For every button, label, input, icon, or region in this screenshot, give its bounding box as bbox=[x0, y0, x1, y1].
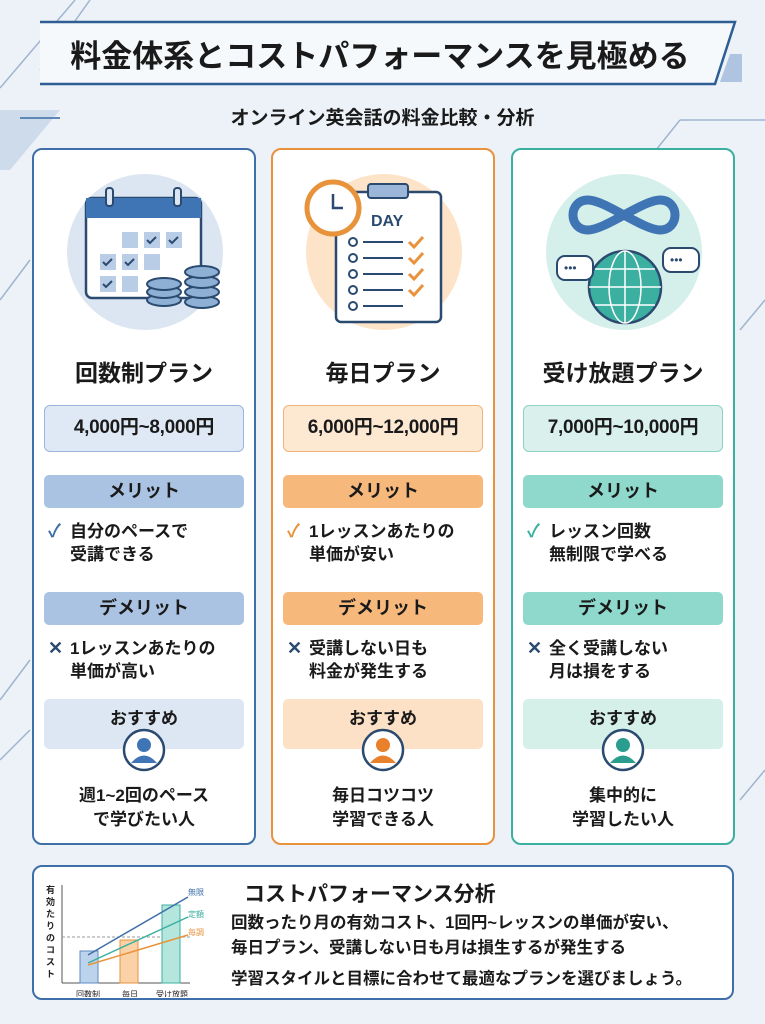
heading: 毎日プラン bbox=[326, 360, 440, 386]
demerit text: 受講しない日も bbox=[309, 639, 428, 658]
demerit text bbox=[48, 638, 215, 681]
title banner: 料金体系とコストパフォーマンスを見極める bbox=[70, 39, 690, 74]
chart: cost comparison: 毎調 bbox=[188, 927, 204, 937]
demerit text: ✕ bbox=[287, 638, 302, 658]
merit text bbox=[287, 521, 454, 564]
price bbox=[523, 405, 723, 452]
recommend box: おすすめ bbox=[110, 709, 178, 728]
merit text bbox=[48, 521, 188, 564]
icon: clipboard with clock bbox=[304, 174, 462, 330]
recommend text: 集中的に bbox=[589, 786, 657, 805]
recommend text: 学習できる人 bbox=[332, 810, 434, 829]
merit text: 1レッスンあたりの bbox=[309, 522, 454, 541]
icon: calendar with coins bbox=[67, 174, 223, 330]
merit bar: メリット bbox=[587, 481, 659, 501]
recommend text bbox=[332, 786, 434, 829]
icon: person bbox=[362, 728, 404, 772]
merit text: 自分のペースで bbox=[70, 522, 188, 541]
demerit bar bbox=[523, 592, 723, 625]
demerit text: 1レッスンあたりの bbox=[70, 639, 215, 658]
merit text: 単価が安い bbox=[309, 545, 394, 564]
demerit text: ✕ bbox=[48, 638, 63, 658]
merit text: 受講できる bbox=[70, 545, 155, 564]
chart: cost comparison: 定額 bbox=[188, 909, 204, 919]
merit bar: メリット bbox=[108, 481, 180, 501]
merit text: ✓ bbox=[527, 521, 540, 541]
chart: cost comparison: コ bbox=[46, 945, 55, 955]
merit bar bbox=[283, 475, 483, 508]
merit text: 無制限で学べる bbox=[549, 545, 668, 564]
analysis text: 回数ったり月の有効コスト、1回円~レッスンの単価が安い、 bbox=[231, 914, 678, 932]
demerit text: ✕ bbox=[527, 638, 542, 658]
chart: cost comparison bbox=[46, 884, 204, 997]
demerit text: 月は損をする bbox=[549, 662, 651, 681]
demerit bar: デメリット bbox=[99, 598, 189, 618]
icon: infinity and globe: ••• bbox=[670, 253, 683, 267]
merit text: ✓ bbox=[287, 521, 300, 541]
analysis text: 毎日プラン、受講しない日も月は損生するが発生する bbox=[231, 939, 626, 957]
chart: cost comparison: 有 bbox=[46, 884, 55, 895]
panel: daily plan bbox=[271, 148, 495, 845]
title banner bbox=[40, 20, 742, 86]
demerit text: 全く受講しない bbox=[549, 639, 668, 658]
recommend text: 週1~2回のペース bbox=[79, 786, 209, 805]
icon: clipboard with clock: DAY bbox=[371, 213, 404, 230]
chart: cost comparison: の bbox=[46, 933, 55, 943]
icon: infinity and globe: ••• bbox=[564, 261, 577, 275]
recommend box: おすすめ bbox=[589, 709, 657, 728]
analysis text bbox=[231, 914, 692, 988]
analysis text: 学習スタイルと目標に合わせて最適なプランを選びましょう。 bbox=[231, 970, 692, 988]
demerit text: 料金が発生する bbox=[309, 662, 428, 681]
price: 7,000円~10,000円 bbox=[548, 417, 698, 438]
recommend text: 学習したい人 bbox=[572, 810, 674, 829]
heading: 回数制プラン bbox=[75, 360, 213, 386]
price bbox=[283, 405, 483, 452]
panel: cost performance analysis bbox=[32, 865, 734, 1000]
chart: cost comparison: ス bbox=[46, 957, 55, 967]
demerit text: 単価が高い bbox=[70, 662, 155, 681]
merit text: ✓ bbox=[48, 521, 61, 541]
analysis heading: コストパフォーマンス分析 bbox=[244, 883, 496, 906]
subtitle: オンライン英会話の料金比較・分析 bbox=[230, 108, 534, 129]
icon: infinity and globe bbox=[546, 174, 702, 330]
demerit bar: デメリット bbox=[578, 598, 668, 618]
demerit text bbox=[287, 638, 428, 681]
chart: cost comparison: ト bbox=[46, 969, 55, 979]
merit bar bbox=[44, 475, 244, 508]
recommend text: で学びたい人 bbox=[93, 810, 195, 829]
merit text: レッスン回数 bbox=[549, 522, 651, 541]
demerit bar: デメリット bbox=[338, 598, 428, 618]
chart: cost comparison: 無限 bbox=[188, 887, 204, 897]
merit bar: メリット bbox=[347, 481, 419, 501]
chart: cost comparison: 効 bbox=[46, 896, 55, 907]
demerit bar bbox=[44, 592, 244, 625]
merit text bbox=[527, 521, 668, 564]
recommend box bbox=[523, 699, 723, 749]
chart: cost comparison: り bbox=[46, 921, 55, 931]
recommend box bbox=[283, 699, 483, 749]
price bbox=[44, 405, 244, 452]
demerit text bbox=[527, 638, 668, 681]
merit bar bbox=[523, 475, 723, 508]
icon: person bbox=[602, 728, 644, 772]
price: 6,000円~12,000円 bbox=[308, 417, 458, 438]
recommend box: おすすめ bbox=[349, 709, 417, 728]
demerit bar bbox=[283, 592, 483, 625]
icon: person bbox=[122, 728, 166, 772]
chart: cost comparison: た bbox=[46, 909, 55, 919]
recommend text bbox=[572, 786, 674, 829]
panel: per-lesson plan bbox=[32, 148, 256, 845]
heading: 受け放題プラン bbox=[542, 360, 704, 386]
recommend text bbox=[79, 786, 209, 829]
recommend box bbox=[44, 699, 244, 749]
panel: unlimited plan bbox=[511, 148, 735, 845]
recommend text: 毎日コツコツ bbox=[332, 786, 434, 805]
price: 4,000円~8,000円 bbox=[74, 417, 214, 438]
